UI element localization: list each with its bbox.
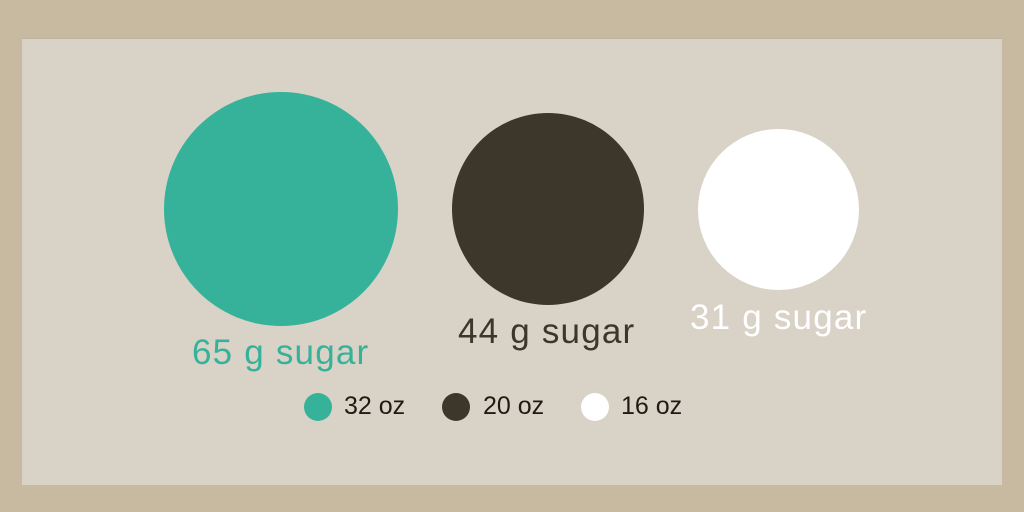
legend item: 16 oz bbox=[581, 392, 682, 421]
label: 31 g sugar: 31 g sugar bbox=[690, 298, 867, 337]
legend item: 32 oz: 32 oz bbox=[344, 392, 405, 420]
legend item: 20 oz: 20 oz bbox=[483, 392, 544, 420]
legend item: 20 oz bbox=[442, 392, 544, 421]
label: 65 g sugar: 65 g sugar bbox=[192, 333, 369, 372]
circle: 16 oz bbox=[698, 129, 859, 290]
legend bbox=[304, 392, 682, 421]
legend item: 16 oz: 16 oz bbox=[621, 392, 682, 420]
circle: 32 oz bbox=[164, 92, 398, 326]
legend item: 32 oz bbox=[304, 392, 405, 421]
circle: 20 oz bbox=[452, 113, 644, 305]
label: 44 g sugar: 44 g sugar bbox=[458, 312, 635, 351]
